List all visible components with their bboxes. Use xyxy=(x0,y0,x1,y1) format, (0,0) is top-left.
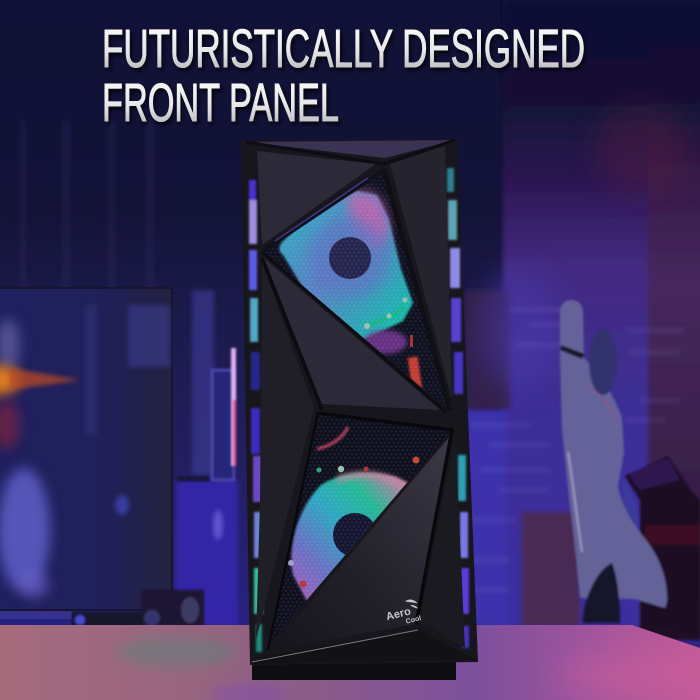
middle diagonal facet xyxy=(264,258,440,410)
Aerocool logo: Cool xyxy=(405,615,422,626)
Aerocool logo: Aero xyxy=(385,605,412,623)
PC case xyxy=(231,139,478,680)
case base xyxy=(252,655,456,680)
middle left facet xyxy=(256,262,314,640)
top facet xyxy=(246,140,455,158)
desk clutter xyxy=(72,590,204,626)
upper right facet xyxy=(390,146,452,400)
lower fan mesh xyxy=(271,415,450,642)
bottom edge xyxy=(250,630,476,664)
table xyxy=(0,625,700,700)
case body xyxy=(241,139,478,665)
dark furniture behind chair xyxy=(625,456,700,640)
right side light strip xyxy=(447,168,469,648)
upper left facet xyxy=(257,151,376,245)
lower right facet xyxy=(420,436,465,648)
lower main facet xyxy=(270,436,450,650)
Aerocool logo xyxy=(383,598,422,630)
left side light strip xyxy=(231,180,263,652)
upper fan mesh xyxy=(262,174,447,409)
monitor xyxy=(0,288,172,619)
upper fan frame strut xyxy=(264,170,384,250)
chair body xyxy=(560,300,667,608)
title xyxy=(102,19,585,133)
gaming chair xyxy=(560,300,700,640)
title line 2: FRONT PANEL xyxy=(102,73,339,133)
curtain stripes xyxy=(20,120,154,290)
